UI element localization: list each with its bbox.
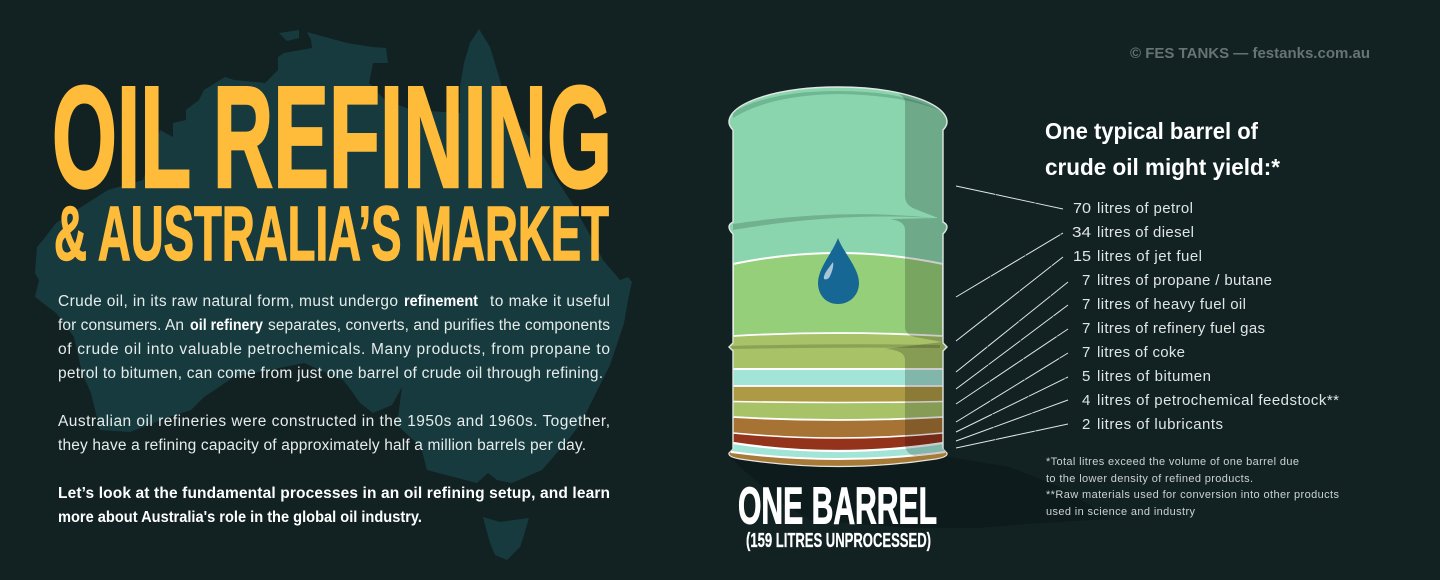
title [52, 56, 612, 277]
yield list: litres of petrochemical feedstock** [1097, 392, 1339, 409]
layer: coke [734, 418, 942, 438]
yield list: 34 [1072, 224, 1091, 241]
barrel caption [738, 478, 937, 552]
yield list: 4 [1082, 392, 1090, 409]
intro text: to make it useful [490, 293, 610, 310]
yield list: litres of diesel [1097, 224, 1194, 241]
yield list: 70 [1073, 200, 1091, 217]
yield list: 7 [1082, 320, 1090, 337]
yield list: litres of propane / butane [1097, 272, 1272, 289]
layer: diesel [733, 253, 943, 340]
intro text: of crude oil into valuable petrochemicals. Many products, from propane to [58, 341, 610, 358]
layer: petrol [725, 85, 951, 265]
yield list: 7 [1082, 344, 1090, 361]
footnotes: to the lower density of refined products. [1046, 473, 1253, 485]
icon: oil drop [818, 238, 859, 304]
intro text: separates, converts, and purifies the components [268, 317, 610, 334]
intro text: refinement [404, 293, 478, 310]
yield list: 15 [1073, 248, 1091, 265]
yield heading [1045, 118, 1280, 180]
barrel caption: ONE BARREL [738, 478, 937, 536]
copyright: © FES TANKS — festanks.com.au [1130, 46, 1370, 62]
yield list: litres of lubricants [1097, 416, 1223, 433]
map of Australia [35, 29, 632, 560]
layer dividers [731, 333, 945, 459]
yield list: 7 [1082, 296, 1090, 313]
yield heading: One typical barrel of [1045, 118, 1258, 144]
barrel caption: (159 LITRES UNPROCESSED) [746, 530, 931, 552]
barrel rim shading [729, 90, 950, 456]
yield list: litres of refinery fuel gas [1097, 320, 1265, 337]
yield list: litres of heavy fuel oil [1097, 296, 1246, 313]
intro text: petrol to bitumen, can come from just one barrel of crude oil through refining. [58, 365, 603, 382]
layer: feedstock [731, 444, 945, 458]
intro text: Let’s look at the fundamental processes in an oil refining setup, and learn [58, 485, 610, 502]
title: OIL REFINING [52, 56, 612, 218]
yield list: 7 [1082, 272, 1090, 289]
leader lines [956, 186, 1068, 448]
intro text: more about Australia's role in the global oil industry. [58, 509, 422, 526]
yield list: litres of petrol [1097, 200, 1193, 217]
yield list: 5 [1082, 368, 1090, 385]
layer: propane and butane [734, 370, 942, 386]
yield list: 2 [1082, 416, 1090, 433]
layer: bitumen [734, 434, 942, 450]
footnotes: used in science and industry [1046, 506, 1196, 518]
barrel outline [729, 87, 947, 449]
yield list: litres of jet fuel [1097, 248, 1202, 265]
footnotes: *Total litres exceed the volume of one barrel due [1046, 456, 1299, 468]
barrel base rim [729, 449, 947, 466]
yield list: litres of bitumen [1097, 368, 1211, 385]
intro text: they have a refining capacity of approximately half a million barrels per day. [58, 437, 586, 454]
barrel shadow [730, 456, 1110, 528]
layer: heavy fuel oil [734, 386, 942, 402]
intro text: oil refinery [190, 317, 263, 334]
oil barrel [725, 85, 951, 466]
yield list [1072, 200, 1339, 433]
intro text: for consumers. An [58, 317, 184, 334]
layer: jet fuel [730, 334, 946, 368]
yield heading: crude oil might yield:* [1045, 154, 1280, 180]
layer: refinery fuel gas [734, 402, 942, 420]
footnotes: **Raw materials used for conversion into other products [1046, 489, 1340, 501]
intro text [58, 293, 610, 526]
title: & AUSTRALIA’S MARKET [54, 191, 609, 277]
footnotes [1046, 456, 1340, 518]
yield list: litres of coke [1097, 344, 1185, 361]
intro text: Crude oil, in its raw natural form, must undergo [58, 293, 398, 310]
intro text: Australian oil refineries were constructed in the 1950s and 1960s. Together, [58, 413, 610, 430]
